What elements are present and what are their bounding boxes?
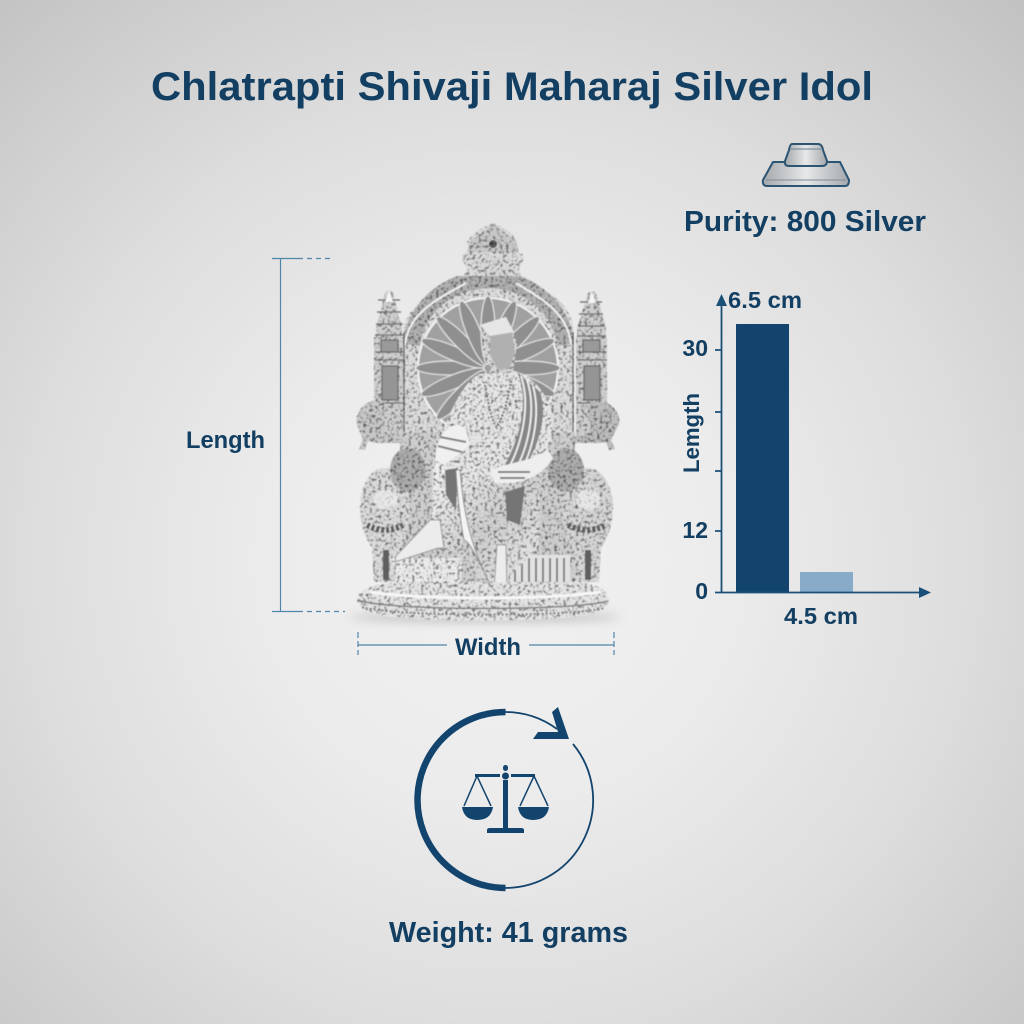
crown	[467, 223, 519, 282]
base shadow	[350, 612, 620, 622]
icon: weight ring with scales	[418, 707, 593, 888]
weight label: Weight: 41 grams	[389, 917, 628, 949]
thin arcs	[506, 712, 593, 888]
y axis label: Lemgth	[679, 393, 704, 473]
seated figure	[392, 317, 553, 600]
left shin and foot	[395, 520, 444, 562]
purity label: Purity: 800 Silver	[684, 206, 926, 238]
arm	[435, 425, 470, 465]
light bar	[800, 572, 853, 592]
tower highlights	[385, 290, 596, 303]
footstool	[392, 558, 462, 590]
lion manes inner	[390, 448, 426, 492]
lion left	[360, 468, 410, 582]
face	[490, 332, 515, 370]
torso	[440, 372, 553, 480]
top value label: 6.5 cm	[728, 287, 802, 313]
x value label: 4.5 cm	[784, 603, 858, 629]
elephant right	[570, 401, 619, 450]
axes	[715, 300, 922, 592]
axis arrowheads	[716, 294, 931, 598]
length label: Length	[186, 427, 265, 454]
base	[357, 582, 609, 620]
width dimension	[358, 632, 614, 661]
arch band	[411, 279, 566, 345]
title: Chlatrapti Shivaji Maharaj Silver Idol	[151, 65, 873, 109]
width label: Width	[455, 634, 521, 661]
throne pleats	[510, 555, 570, 582]
tower left	[374, 290, 405, 443]
y tick labels: 0	[695, 578, 708, 604]
sash folds	[502, 372, 543, 476]
necklace	[485, 378, 512, 427]
bar chart	[679, 287, 931, 629]
dark bar	[736, 324, 789, 592]
throne back	[374, 223, 607, 470]
icon: silver bars	[763, 144, 849, 186]
lion legs shadow	[383, 550, 591, 580]
tower right	[576, 292, 607, 443]
halo wheel	[416, 296, 560, 438]
elephant left	[357, 400, 404, 450]
tower details	[375, 300, 606, 403]
length dimension	[186, 258, 345, 612]
y tick labels: 30	[682, 335, 708, 361]
y tick labels: 12	[682, 517, 708, 543]
idol illustration	[350, 223, 620, 622]
right shin and foot	[494, 545, 507, 595]
y tick labels	[682, 335, 708, 604]
dark robe shadows	[445, 468, 525, 525]
arrow head	[533, 707, 569, 739]
right forearm	[490, 450, 553, 483]
thick arc	[418, 712, 506, 888]
lion right	[562, 468, 613, 582]
side panels and seat	[357, 400, 619, 585]
robe and legs	[432, 463, 540, 600]
lion stripes	[367, 525, 606, 530]
sword	[456, 470, 489, 582]
scales	[462, 765, 549, 833]
turban and head	[480, 317, 517, 374]
